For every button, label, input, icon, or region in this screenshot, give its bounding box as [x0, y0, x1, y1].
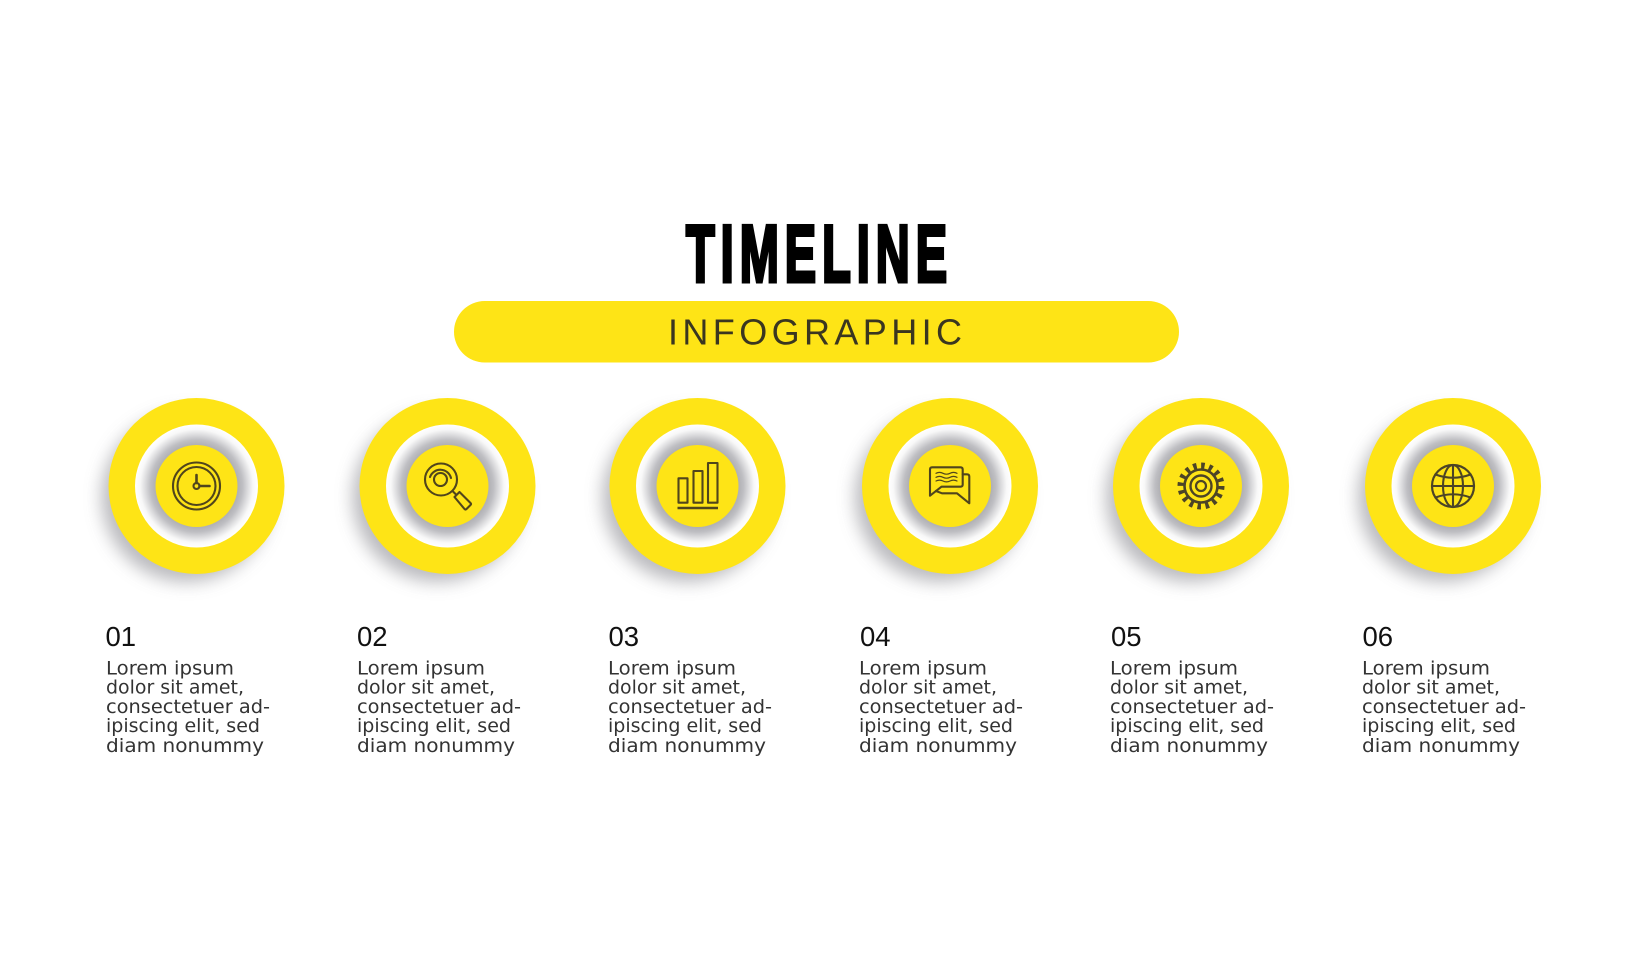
- label 03: diam nonummy: [608, 736, 766, 757]
- label 06: Lorem ipsum: [1362, 658, 1490, 680]
- label 04: 04: [860, 621, 891, 652]
- label 04: diam nonummy: [859, 736, 1017, 757]
- label 05: 05: [1111, 621, 1142, 652]
- badge 06: [1358, 398, 1541, 582]
- label 05: diam nonummy: [1110, 736, 1268, 757]
- step 04: [855, 398, 1038, 757]
- step 06: [1358, 398, 1541, 757]
- step 03: [602, 398, 786, 757]
- label 03: ipiscing elit, sed: [608, 716, 762, 737]
- label 02: ipiscing elit, sed: [357, 716, 511, 737]
- label 02: diam nonummy: [357, 736, 515, 757]
- label 03: consectetuer ad-: [608, 697, 772, 718]
- badge 01: [102, 398, 284, 582]
- label 05: Lorem ipsum: [1110, 658, 1238, 680]
- label 04: consectetuer ad-: [859, 697, 1023, 718]
- label 01: consectetuer ad-: [106, 697, 270, 718]
- label 04: ipiscing elit, sed: [859, 716, 1013, 737]
- step 01: [102, 398, 284, 757]
- banner pill: [454, 301, 1179, 362]
- label 01: ipiscing elit, sed: [106, 716, 260, 737]
- label 01: Lorem ipsum: [106, 658, 234, 680]
- label 06: diam nonummy: [1362, 736, 1520, 757]
- label 03: [608, 621, 772, 757]
- label 04: Lorem ipsum: [859, 658, 987, 680]
- label 03: Lorem ipsum: [608, 658, 736, 680]
- label 03: 03: [608, 621, 639, 652]
- icon: bar chart: [678, 463, 718, 508]
- badge 02: [352, 398, 536, 582]
- label 03: dolor sit amet,: [608, 678, 746, 698]
- label 04: [859, 621, 1023, 757]
- label 06: [1362, 621, 1526, 757]
- label 02: dolor sit amet,: [357, 678, 495, 698]
- label 01: [106, 621, 270, 757]
- label 05: [1110, 621, 1274, 757]
- label 04: dolor sit amet,: [859, 678, 997, 698]
- subtitle banner: [454, 301, 1179, 362]
- step 02: [352, 398, 536, 757]
- banner text: INFOGRAPHIC: [668, 312, 962, 352]
- label 02: consectetuer ad-: [357, 697, 521, 718]
- icon: chat bubbles: [930, 467, 969, 503]
- label 05: ipiscing elit, sed: [1110, 716, 1264, 737]
- label 01: diam nonummy: [106, 736, 264, 757]
- label 05: dolor sit amet,: [1110, 678, 1248, 698]
- label 01: dolor sit amet,: [106, 678, 244, 698]
- badge 05: [1106, 398, 1289, 582]
- label 02: 02: [357, 621, 388, 652]
- icon: clock: [173, 462, 220, 510]
- label 06: consectetuer ad-: [1362, 697, 1526, 718]
- title: TIMELINE: [686, 209, 953, 300]
- label 06: dolor sit amet,: [1362, 678, 1500, 698]
- badge 03: [602, 398, 786, 582]
- label 06: 06: [1362, 621, 1393, 652]
- label 02: [357, 621, 521, 757]
- label 01: 01: [106, 621, 136, 652]
- step 05: [1106, 398, 1289, 757]
- icon: globe: [1432, 465, 1474, 507]
- icon: magnifying glass: [425, 464, 471, 510]
- badge 04: [855, 398, 1038, 582]
- icon: gear: [1180, 466, 1222, 506]
- label 06: ipiscing elit, sed: [1362, 716, 1516, 737]
- label 05: consectetuer ad-: [1110, 697, 1274, 718]
- label 02: Lorem ipsum: [357, 658, 485, 680]
